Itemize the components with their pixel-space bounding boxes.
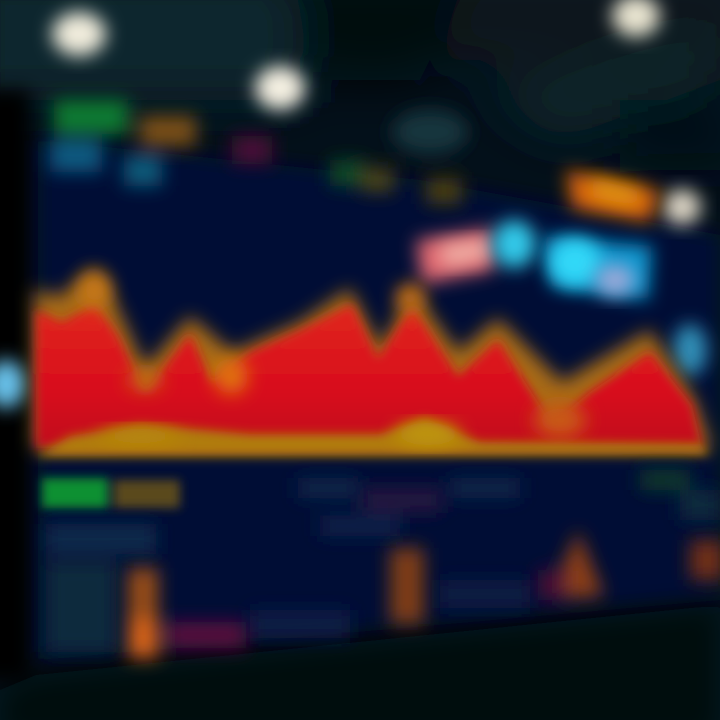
ceiling lights <box>52 0 701 225</box>
left dark edge <box>0 90 30 680</box>
lower table legend <box>42 478 180 508</box>
screen panel <box>38 140 720 660</box>
area chart <box>34 268 712 456</box>
lower table orange bars <box>128 530 720 658</box>
area chart outline <box>34 268 712 450</box>
ceiling background <box>0 0 720 170</box>
area chart red fill <box>36 304 702 448</box>
baseline yellow band <box>36 418 710 456</box>
orange flag <box>566 170 660 222</box>
lower table text blocks <box>46 470 720 652</box>
pink label and cyan highlight <box>0 220 707 408</box>
orange highlights <box>79 272 586 438</box>
top legend blocks <box>50 100 468 204</box>
bottom floor <box>0 605 720 720</box>
